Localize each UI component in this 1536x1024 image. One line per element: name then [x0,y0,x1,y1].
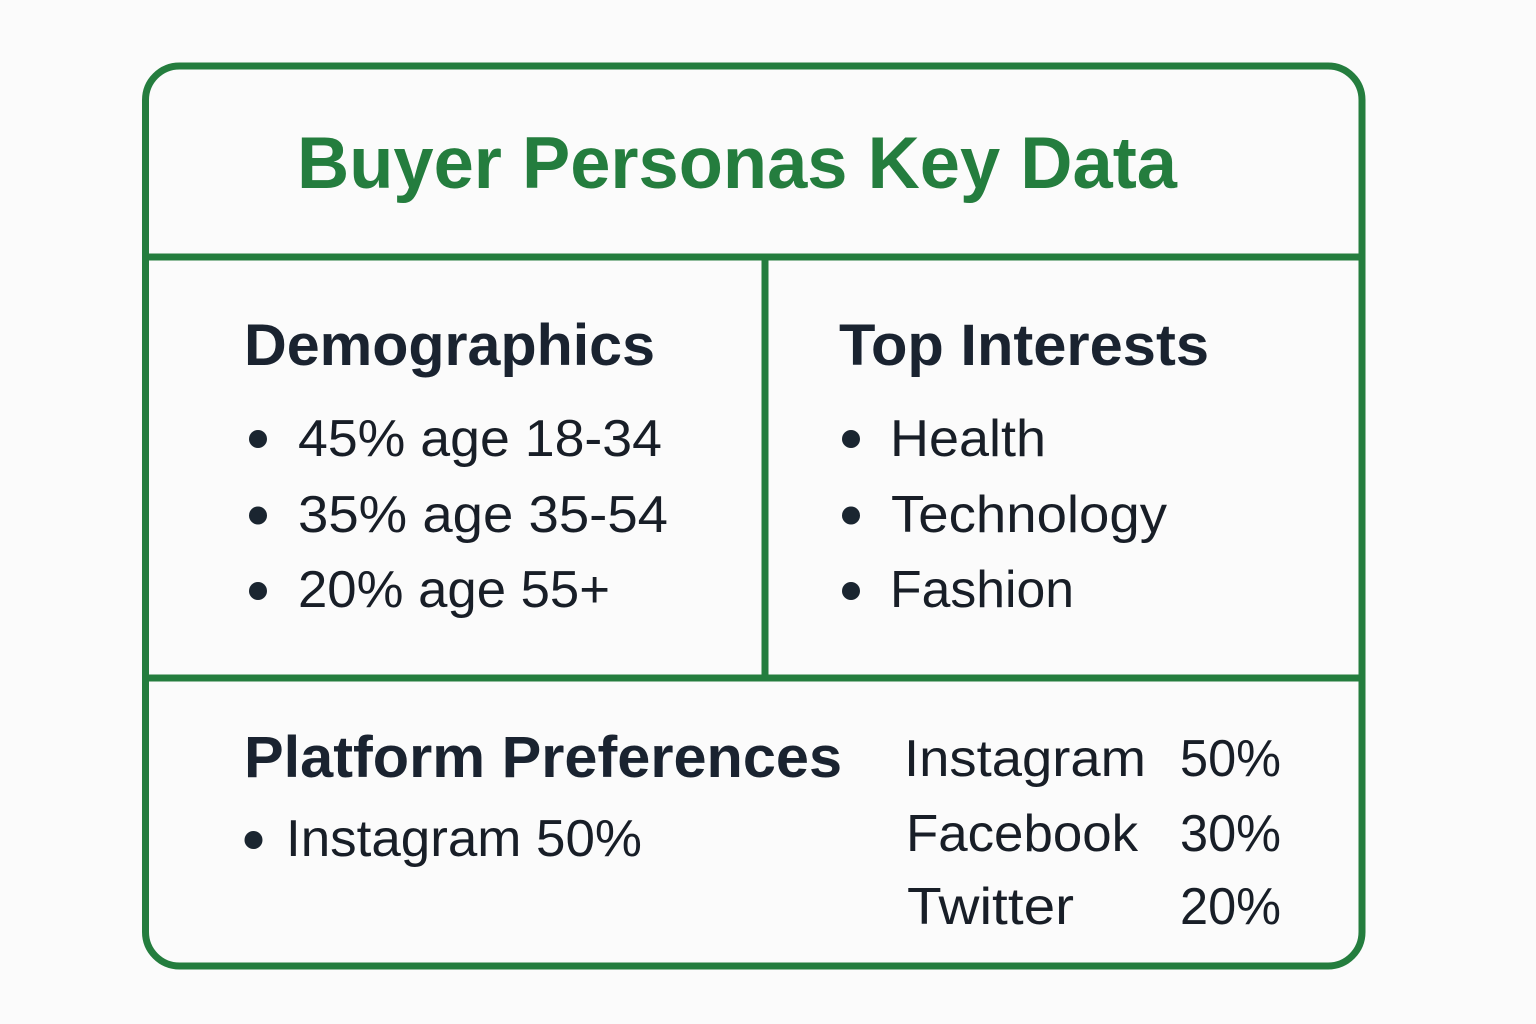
demographics list: 20% age 55+ [298,561,610,619]
demographics list: 35% age 35-54 [298,486,668,544]
card frame [146,66,1362,966]
top interests list: Fashion [890,561,1074,619]
platform share table: 20% [1180,878,1281,936]
panel: platform preferences [244,725,1281,936]
demographics list: 45% age 18-34 [298,410,662,468]
platform bullet: Instagram 50% [286,810,642,868]
title: Buyer Personas Key Data [297,123,1178,204]
demographics heading: Demographics [244,313,655,378]
platform preferences heading: Platform Preferences [244,725,842,790]
platform share table: 50% [1180,730,1281,788]
top interests list: Health [890,410,1046,468]
panel: demographics [244,313,668,619]
platform share table [904,730,1281,936]
platform share table: Facebook [906,805,1139,863]
demographics list [249,410,668,619]
panel: top interests [839,313,1209,619]
top interests list: Technology [891,486,1167,544]
platform share table: 30% [1180,805,1281,863]
top interests list [842,410,1167,619]
platform share table: Instagram [904,730,1146,788]
platform share table: Twitter [907,878,1074,936]
top interests heading: Top Interests [839,313,1209,378]
